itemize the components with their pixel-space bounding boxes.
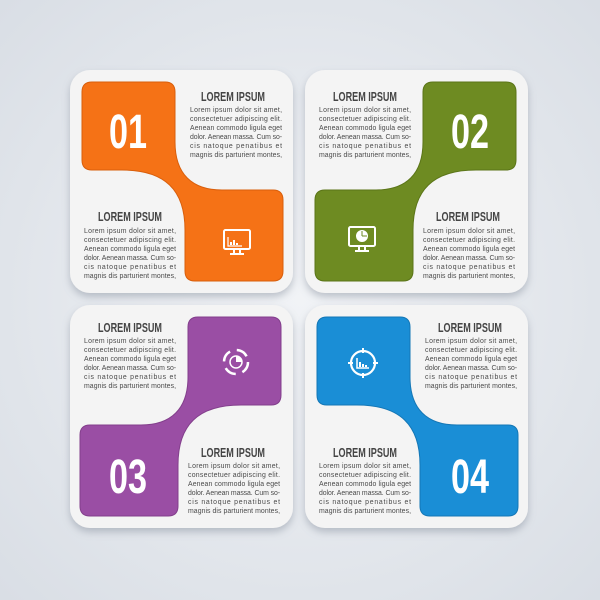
- text block top: consectetuer adipiscing elit.: [425, 347, 517, 354]
- text block top: consectetuer adipiscing elit.: [319, 116, 411, 123]
- text block bottom: Aenean commodo ligula eget: [319, 481, 411, 488]
- shape: green: [315, 82, 516, 281]
- text block bottom: consectetuer adipiscing elit.: [423, 237, 515, 244]
- text block top: Lorem ipsum dolor sit amet,: [319, 107, 411, 114]
- text block top: LOREM IPSUM: [333, 89, 397, 104]
- panel: card 04: [305, 305, 528, 528]
- text block top: magnis dis parturient montes,: [425, 383, 517, 390]
- text block bottom: LOREM IPSUM: [201, 445, 265, 460]
- text block top: magnis dis parturient montes,: [319, 152, 411, 159]
- panel: card 03: [70, 305, 293, 528]
- text block bottom: magnis dis parturient montes,: [423, 273, 515, 280]
- text block top: Aenean commodo ligula eget: [319, 125, 411, 132]
- text block bottom: Lorem ipsum dolor sit amet,: [423, 228, 515, 235]
- text block bottom: consectetuer adipiscing elit.: [84, 237, 176, 244]
- text block top: Lorem ipsum dolor sit amet,: [425, 338, 517, 345]
- panel: card 02: [305, 70, 528, 293]
- text block top: dolor. Aenean massa. Cum so-: [190, 134, 282, 141]
- text block top: Lorem ipsum dolor sit amet,: [84, 338, 176, 345]
- text block bottom: [188, 445, 280, 515]
- text block top: Aenean commodo ligula eget: [425, 356, 517, 363]
- text block bottom: dolor. Aenean massa. Cum so-: [84, 255, 176, 262]
- shape: orange: [82, 82, 283, 281]
- text block bottom: Lorem ipsum dolor sit amet,: [319, 463, 411, 470]
- text block top: consectetuer adipiscing elit.: [190, 116, 282, 123]
- text block top: magnis dis parturient montes,: [84, 383, 176, 390]
- text block bottom: Lorem ipsum dolor sit amet,: [188, 463, 280, 470]
- text block top: [425, 320, 517, 390]
- text block top: cis natoque penatibus et: [84, 374, 176, 381]
- text block top: LOREM IPSUM: [98, 320, 162, 335]
- text block bottom: LOREM IPSUM: [98, 209, 162, 224]
- text block bottom: dolor. Aenean massa. Cum so-: [319, 490, 411, 497]
- text block top: magnis dis parturient montes,: [190, 152, 282, 159]
- text block top: cis natoque penatibus et: [190, 143, 282, 150]
- text block top: cis natoque penatibus et: [319, 143, 411, 150]
- text block bottom: LOREM IPSUM: [436, 209, 500, 224]
- shape: blue: [317, 317, 518, 516]
- text block top: [190, 89, 282, 159]
- text block bottom: consectetuer adipiscing elit.: [319, 472, 411, 479]
- text block bottom: cis natoque penatibus et: [188, 499, 280, 506]
- text block bottom: cis natoque penatibus et: [84, 264, 176, 271]
- text block top: consectetuer adipiscing elit.: [84, 347, 176, 354]
- text block top: dolor. Aenean massa. Cum so-: [425, 365, 517, 372]
- text block bottom: magnis dis parturient montes,: [319, 508, 411, 515]
- text block bottom: Aenean commodo ligula eget: [84, 246, 176, 253]
- number 03: 03: [109, 451, 147, 504]
- text block bottom: [423, 209, 515, 280]
- text block bottom: [84, 209, 176, 280]
- text block bottom: Aenean commodo ligula eget: [188, 481, 280, 488]
- text block bottom: cis natoque penatibus et: [423, 264, 515, 271]
- shape: purple: [80, 317, 281, 516]
- number 02: 02: [451, 106, 489, 159]
- text block top: Aenean commodo ligula eget: [190, 125, 282, 132]
- text block bottom: magnis dis parturient montes,: [188, 508, 280, 515]
- icon: cycle arrows: [224, 350, 248, 374]
- text block bottom: Aenean commodo ligula eget: [423, 246, 515, 253]
- text block top: Lorem ipsum dolor sit amet,: [190, 107, 282, 114]
- icon: monitor pie: [349, 227, 375, 251]
- text block bottom: magnis dis parturient montes,: [84, 273, 176, 280]
- text block top: Aenean commodo ligula eget: [84, 356, 176, 363]
- panel: card 01: [70, 70, 293, 293]
- icon: target chart: [348, 348, 378, 378]
- text block bottom: [319, 445, 411, 515]
- text block top: LOREM IPSUM: [438, 320, 502, 335]
- text block top: dolor. Aenean massa. Cum so-: [319, 134, 411, 141]
- number 04: 04: [451, 451, 489, 504]
- text block bottom: LOREM IPSUM: [333, 445, 397, 460]
- text block top: dolor. Aenean massa. Cum so-: [84, 365, 176, 372]
- text block top: [84, 320, 176, 390]
- text block top: cis natoque penatibus et: [425, 374, 517, 381]
- text block top: LOREM IPSUM: [201, 89, 265, 104]
- text block bottom: dolor. Aenean massa. Cum so-: [423, 255, 515, 262]
- text block bottom: consectetuer adipiscing elit.: [188, 472, 280, 479]
- text block top: [319, 89, 411, 159]
- text block bottom: Lorem ipsum dolor sit amet,: [84, 228, 176, 235]
- text block bottom: cis natoque penatibus et: [319, 499, 411, 506]
- number 01: 01: [109, 106, 147, 159]
- icon: monitor chart: [224, 230, 250, 254]
- text block bottom: dolor. Aenean massa. Cum so-: [188, 490, 280, 497]
